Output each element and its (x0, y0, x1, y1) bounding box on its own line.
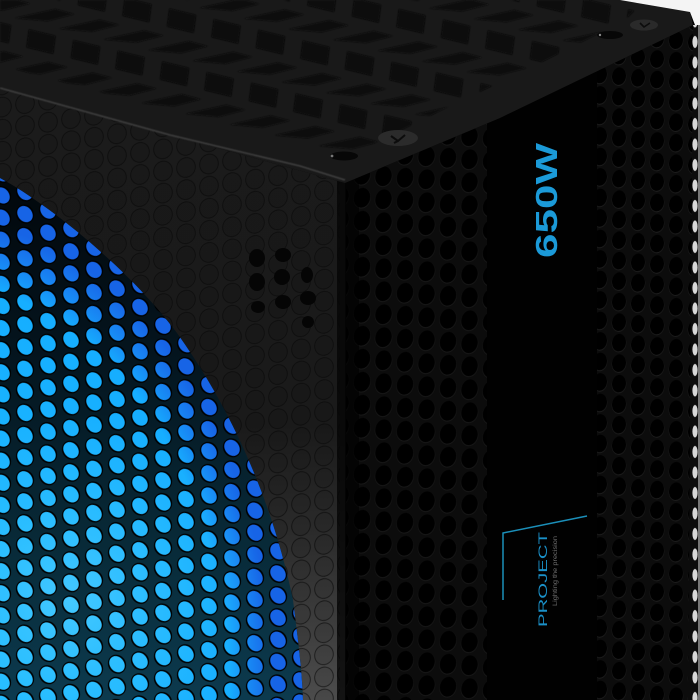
wattage label: 650W (529, 142, 564, 258)
panel: side face of power supply (345, 25, 700, 700)
fan glow behind perforations (0, 170, 310, 700)
logo tagline: Lighting the precision (552, 536, 559, 606)
panel: perforated front face (0, 88, 346, 700)
right edge perforation (689, 25, 700, 700)
panel: top face with cut-outs (0, 0, 693, 183)
panel: black label strip (487, 70, 597, 700)
front top edge highlight (0, 88, 345, 180)
lit fan holes (0, 170, 310, 700)
logo wordmark: PROJECT (536, 531, 550, 627)
dark vent cluster (249, 248, 316, 328)
screw and hole details (330, 20, 658, 160)
background corner (620, 0, 700, 25)
logo bracket (503, 516, 587, 600)
